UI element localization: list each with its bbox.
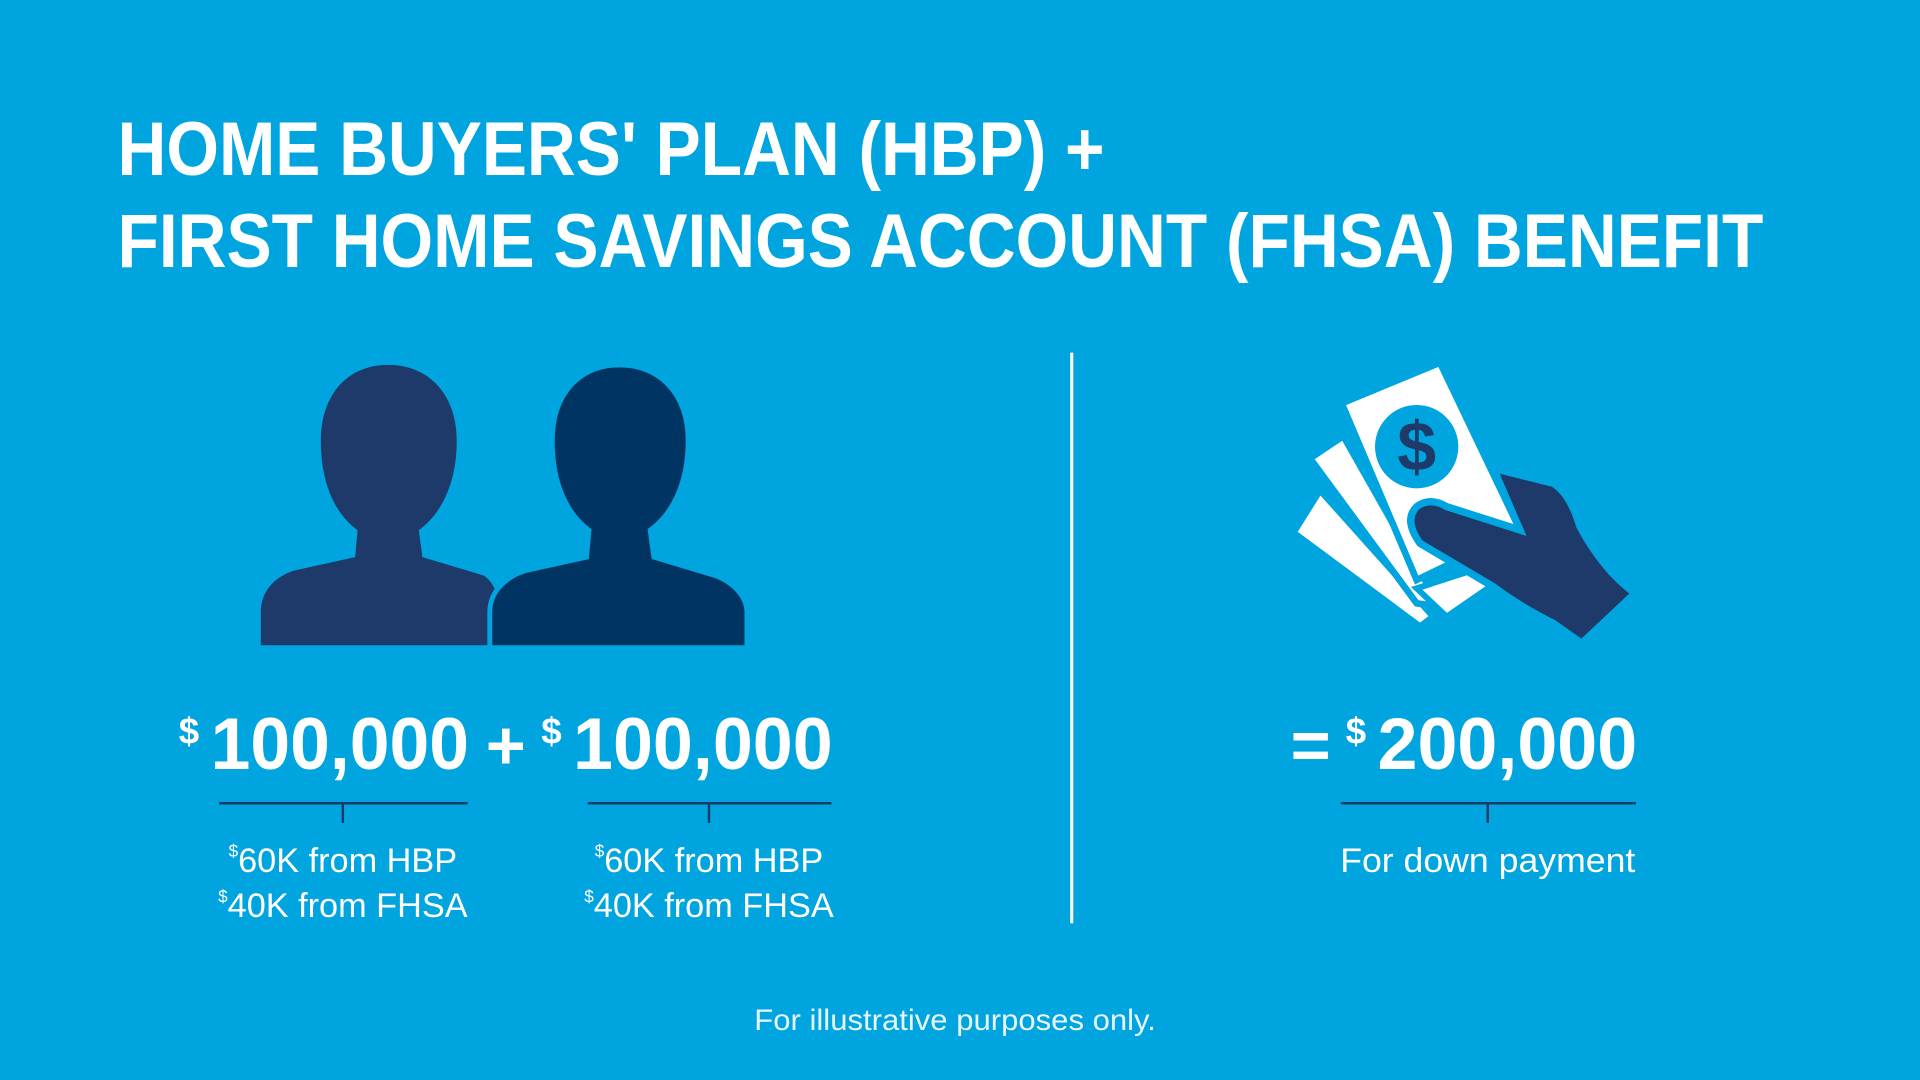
icon: person 2 bbox=[490, 365, 747, 648]
breakdown 1: 40K from FHSA bbox=[228, 887, 468, 925]
breakdown 2: $ bbox=[584, 886, 594, 906]
plus sign: + bbox=[486, 707, 526, 784]
brackets bbox=[219, 803, 1636, 823]
breakdown 2 bbox=[584, 841, 834, 925]
footer note: For illustrative purposes only. bbox=[754, 1004, 1156, 1037]
amount 2: 100,000 bbox=[573, 702, 833, 785]
amount 2: $ bbox=[541, 710, 562, 751]
icon: person 1 bbox=[261, 365, 500, 645]
icon: hand with money bbox=[1293, 363, 1635, 643]
total amount: = bbox=[1291, 707, 1331, 784]
icon: hand with money: $ bbox=[1397, 408, 1436, 486]
title: HOME BUYERS' PLAN (HBP) + bbox=[118, 107, 1104, 192]
amount 1: $ bbox=[179, 710, 199, 751]
breakdown 1: $ bbox=[218, 886, 228, 906]
title bbox=[118, 107, 1763, 284]
breakdown 2: 60K from HBP bbox=[604, 842, 823, 880]
total amount: 200,000 bbox=[1378, 702, 1637, 785]
breakdown 1: 60K from HBP bbox=[238, 842, 457, 880]
breakdown 1 bbox=[218, 841, 468, 925]
amount 1: 100,000 bbox=[211, 702, 469, 785]
breakdown 2: 40K from FHSA bbox=[594, 887, 834, 925]
breakdown 2: $ bbox=[595, 841, 605, 861]
down payment label: For down payment bbox=[1340, 842, 1636, 880]
title: FIRST HOME SAVINGS ACCOUNT (FHSA) BENEFIT bbox=[118, 199, 1763, 284]
breakdown 1: $ bbox=[229, 841, 239, 861]
total amount: $ bbox=[1346, 710, 1366, 751]
